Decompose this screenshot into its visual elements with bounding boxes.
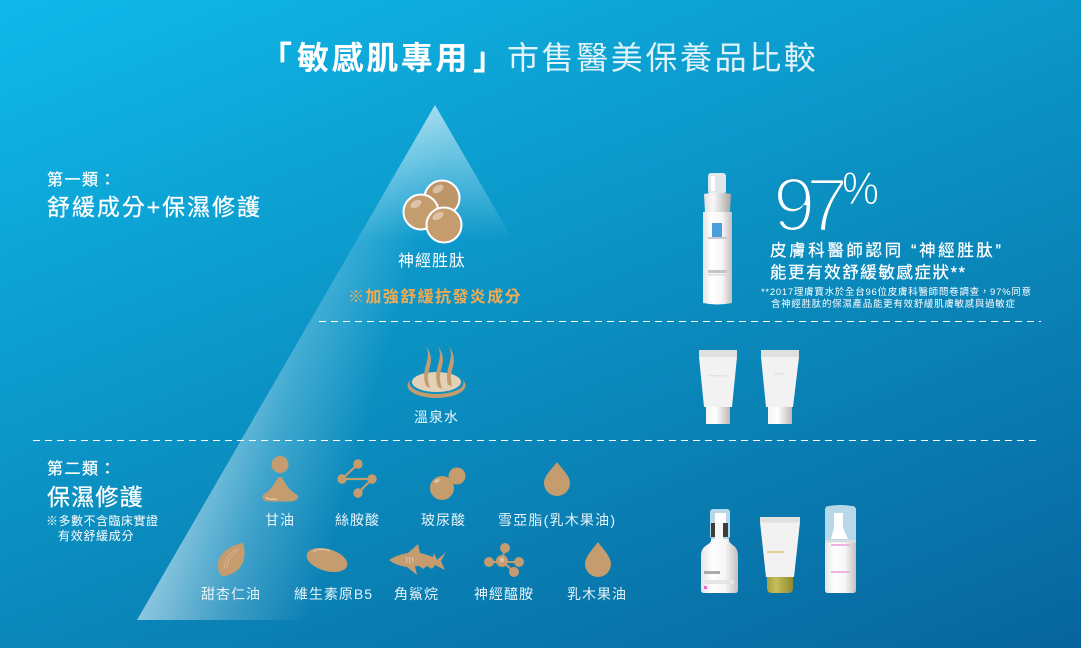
stat: 97 percent <box>773 162 879 248</box>
label: spring water: 溫泉水 <box>414 409 459 425</box>
text: dermatologist claim <box>770 241 1001 282</box>
callout: anti-inflammatory note: ※加強舒緩抗發炎成分 <box>348 287 522 306</box>
text: footnote <box>761 286 1031 310</box>
stat: 97 percent: 9 <box>773 163 815 248</box>
product: olive-cap tube <box>760 517 800 593</box>
divider lines <box>33 322 1041 440</box>
title: 「 <box>260 40 292 76</box>
ingredient labels: 神經醯胺 <box>474 586 534 602</box>
ingredient labels: 絲胺酸 <box>335 512 380 528</box>
panel: category two heading: ※多數不含臨床實證 <box>46 513 159 528</box>
icon: peptide spheres <box>404 180 462 242</box>
product: tube two <box>761 350 799 424</box>
text: footnote: **2017理膚寶水於全台96位皮膚科醫師問卷調查，97%同意 <box>761 286 1031 298</box>
icon: serine molecule <box>337 459 377 498</box>
title <box>260 40 818 76</box>
panel: category two heading <box>46 459 159 543</box>
stat: 97 percent: % <box>842 162 879 214</box>
product: tube one <box>699 350 737 424</box>
panel: category one heading <box>47 170 260 220</box>
icon: sweet almond <box>218 543 245 576</box>
icon: shea oil drop <box>585 542 611 577</box>
ingredient labels: 甘油 <box>265 512 295 528</box>
panel: category one heading: 舒緩成分+保濕修護 <box>47 194 260 220</box>
icon: hot spring <box>408 346 466 398</box>
ingredient labels: 玻尿酸 <box>421 512 466 528</box>
panel: category one heading: 第一類： <box>47 170 117 189</box>
icon: shark <box>389 544 446 575</box>
stat: 97 percent: 7 <box>806 163 848 248</box>
ingredient labels: 維生素原B5 <box>294 586 372 602</box>
ingredient labels: 角鯊烷 <box>394 586 439 602</box>
title: 」 <box>473 40 505 76</box>
title: 市售醫美保養品比較 <box>507 40 818 76</box>
icon: hyaluronic acid <box>430 468 466 500</box>
ingredient labels: 乳木果油 <box>567 586 627 602</box>
product: spray bottle <box>825 505 856 593</box>
icon: ceramide molecule <box>484 543 524 577</box>
product: serum bottle <box>703 173 732 304</box>
ingredient labels <box>201 512 627 602</box>
panel: category two heading: 有效舒緩成分 <box>58 528 134 543</box>
product: pump bottle <box>701 509 738 593</box>
text: dermatologist claim: 皮膚科醫師認同 “神經胜肽” <box>770 241 1001 260</box>
ingredient labels: 雪亞脂(乳木果油) <box>498 512 615 528</box>
panel: category two heading: 第二類： <box>47 459 117 478</box>
label: peptide: 神經胜肽 <box>398 252 466 270</box>
icon: glycerin <box>262 456 298 502</box>
pyramid triangle <box>137 105 733 620</box>
text: footnote: 含神經胜肽的保濕產品能更有效舒緩肌膚敏感與過敏症 <box>771 298 1015 310</box>
panel: category two heading: 保濕修護 <box>47 484 144 510</box>
text: dermatologist claim: 能更有效舒緩敏感症狀** <box>770 262 966 282</box>
icon: vitamin B5 capsule <box>304 544 350 576</box>
icon: shea butter drop <box>544 462 570 496</box>
title: 敏感肌專用 <box>297 40 470 76</box>
ingredient labels: 甜杏仁油 <box>201 586 261 602</box>
